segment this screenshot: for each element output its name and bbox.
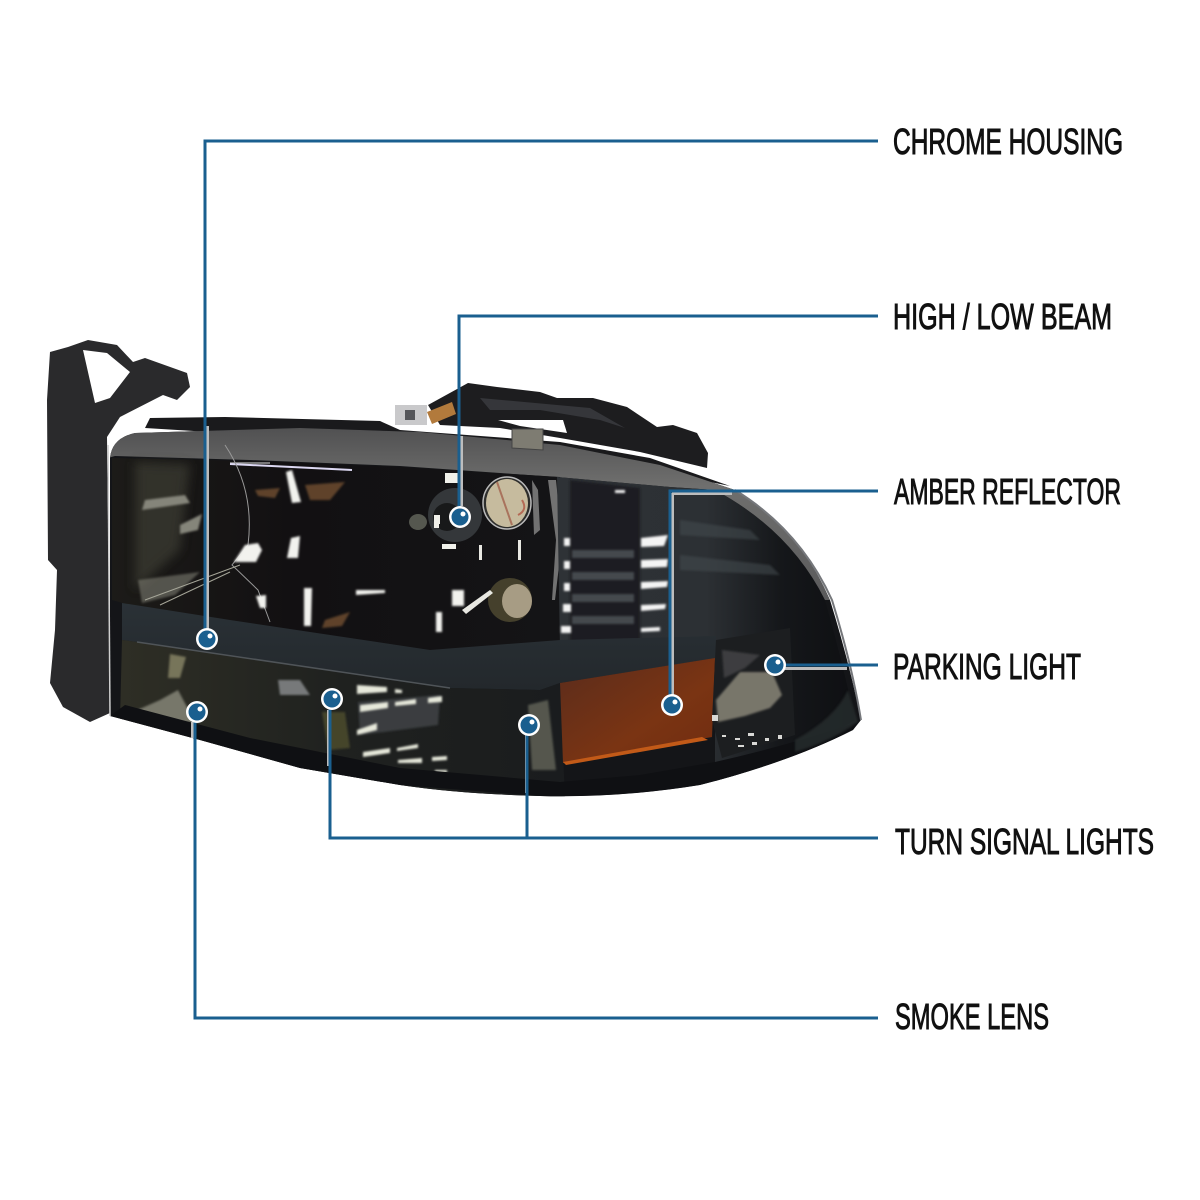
right reflector panel — [557, 477, 825, 781]
amber reflector panel — [560, 658, 715, 765]
marker — [186, 701, 208, 723]
upper lens interior — [127, 444, 560, 634]
label: PARKING LIGHT — [893, 646, 1081, 687]
marker — [449, 506, 471, 528]
marker left — [321, 688, 343, 710]
lower lens lip — [110, 705, 858, 796]
low beam bulb — [488, 578, 532, 622]
label: SMOKE LENS — [895, 996, 1049, 1037]
parking light bulb area — [712, 628, 795, 758]
lens housing body — [110, 428, 861, 796]
upper lens rim — [108, 425, 830, 600]
left reflector detail — [138, 495, 202, 603]
marker right — [518, 714, 540, 736]
stripe highlights — [561, 490, 668, 633]
chrome clip — [512, 429, 543, 450]
marker — [196, 628, 218, 650]
marker — [764, 654, 786, 676]
clear edge highlight — [735, 490, 861, 720]
callout: parking light — [764, 646, 1081, 687]
high and low beam projector area — [409, 473, 562, 622]
callout: turn signal lights — [321, 688, 1154, 862]
callout: high / low beam — [449, 296, 1112, 528]
horizontal lens divider bar — [122, 603, 716, 690]
left edge highlight — [108, 445, 110, 716]
label: HIGH / LOW BEAM — [893, 296, 1112, 337]
callout: chrome housing — [196, 121, 1123, 650]
lens reflections — [234, 470, 464, 632]
top mounting strip — [145, 417, 730, 486]
lower lens interior — [120, 640, 565, 800]
mounting bracket — [47, 340, 190, 722]
high beam bulb — [483, 477, 531, 529]
callout: amber reflector — [661, 471, 1121, 716]
rear connector and wiring — [395, 383, 708, 468]
infographic canvas — [47, 128, 1154, 1030]
marker — [661, 694, 683, 716]
right lens crescent — [795, 690, 858, 752]
light overlay traces on the photo — [191, 426, 847, 793]
amber-brown reflections — [255, 482, 350, 628]
headlight assembly photo illustration — [47, 340, 861, 800]
callout: smoke lens — [186, 701, 1049, 1037]
